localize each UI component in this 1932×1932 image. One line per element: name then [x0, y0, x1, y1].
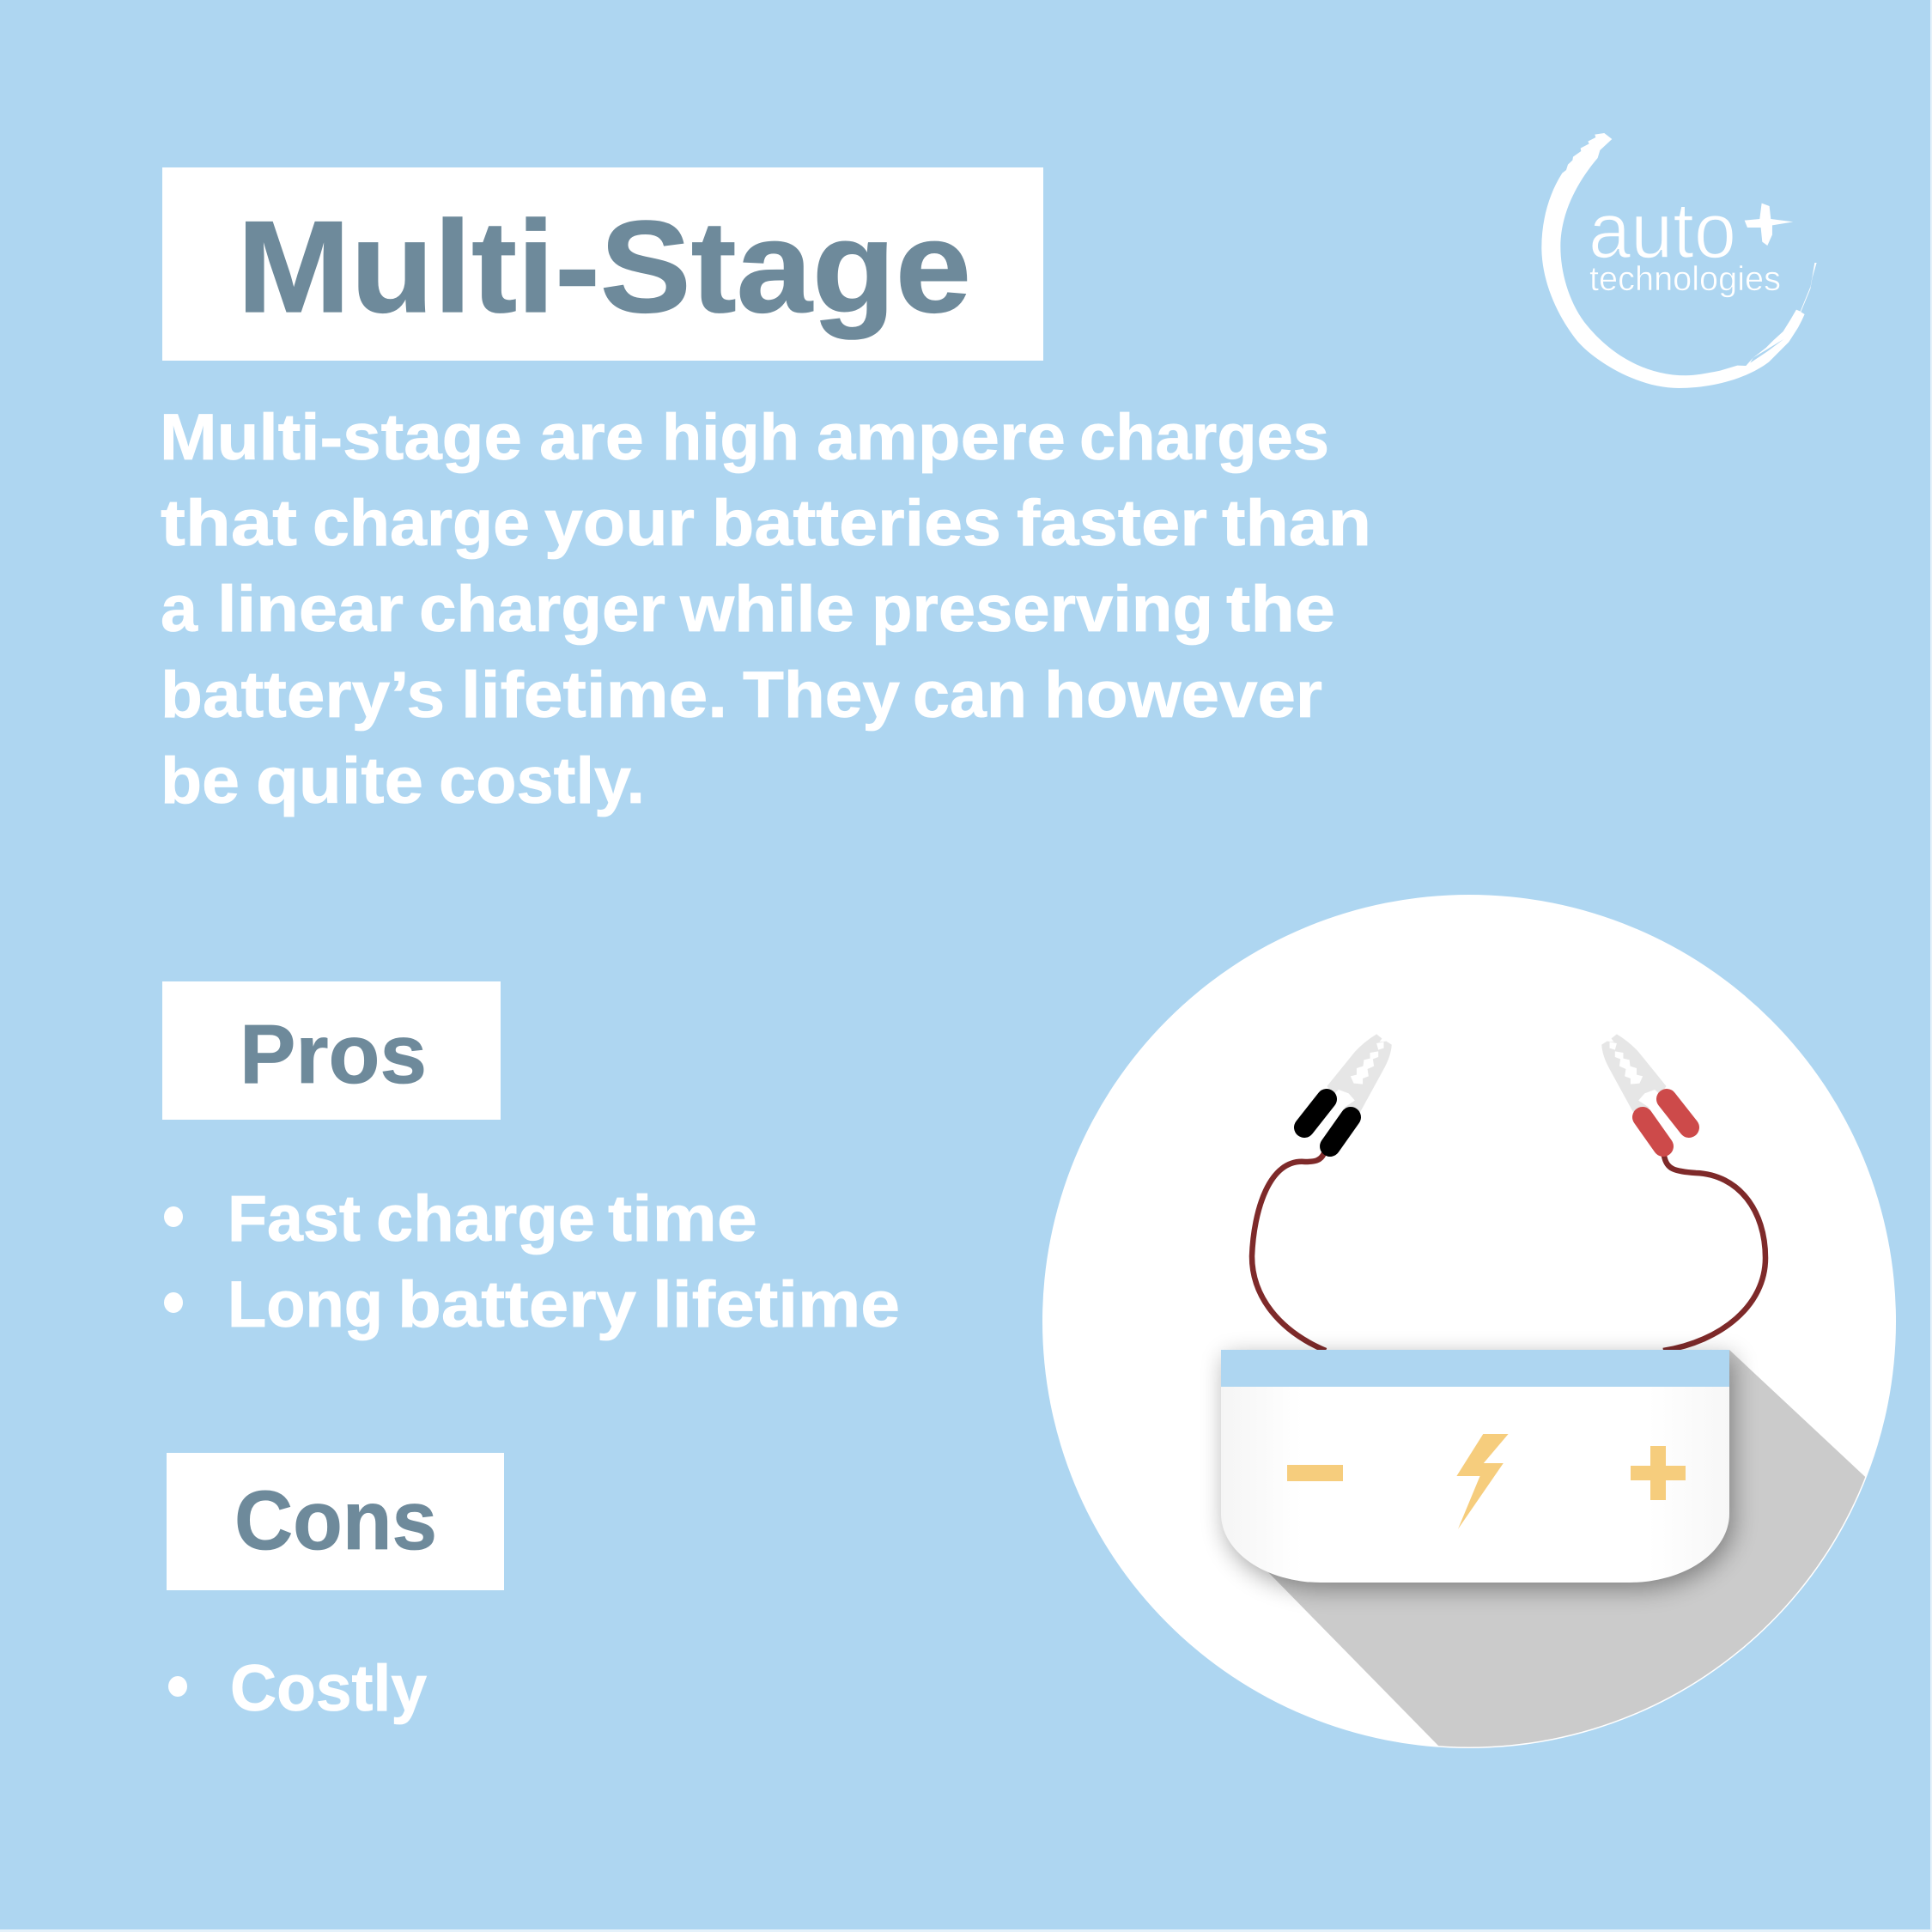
icon: plus terminal [1631, 1446, 1686, 1500]
description text block: high [662, 401, 799, 474]
description text block: linear [217, 573, 404, 646]
pros list [164, 1182, 900, 1341]
description text block: are [539, 401, 644, 474]
description text block: can [913, 659, 1027, 732]
cable: red clamp [1663, 1156, 1765, 1351]
title box [162, 167, 1043, 361]
description text block [160, 401, 1371, 817]
description text block: the [1226, 573, 1335, 646]
icon: lightning bolt [1456, 1434, 1509, 1529]
cons heading: Cons [234, 1473, 437, 1567]
description text block: however [1044, 659, 1322, 732]
description text block: Multi-stage [160, 401, 522, 474]
pros list: battery [398, 1268, 636, 1341]
logo: auto+ technologies [1541, 133, 1817, 388]
description text block: a [161, 573, 198, 646]
description text block: your [544, 487, 695, 560]
description text block: charge [313, 487, 530, 560]
battery [1221, 1350, 1734, 1589]
cable: black clamp [1252, 1153, 1326, 1351]
description text block: charges [1079, 401, 1329, 474]
pros heading: Pros [240, 1007, 427, 1101]
cons heading [167, 1453, 504, 1590]
logo word technologies: technologies [1589, 260, 1781, 298]
logo word auto: auto [1589, 187, 1736, 275]
description text block: batteries [712, 487, 1001, 560]
pros list: lifetime [653, 1268, 900, 1341]
description text block: charger [419, 573, 665, 646]
description text block: while [679, 573, 854, 646]
white circle [1042, 895, 1896, 1748]
cons list: Costly [230, 1652, 427, 1725]
pros list: Fast [228, 1182, 361, 1255]
long cast shadow [1268, 1350, 1865, 1747]
pros list: time [608, 1182, 757, 1255]
icon: minus terminal [1287, 1465, 1343, 1481]
logo plus [1745, 204, 1793, 246]
black clamp [1304, 1034, 1392, 1146]
description text block: They [743, 659, 900, 732]
title: Multi-Stage [237, 194, 971, 340]
pros list: Long [228, 1268, 383, 1341]
description text block: than [1222, 487, 1371, 560]
description text block: preserving [872, 573, 1213, 646]
description text block: ampere [817, 401, 1066, 474]
logo brush slit [1750, 339, 1783, 363]
description text block: be [161, 744, 240, 817]
description text block: faster [1017, 487, 1207, 560]
description text block: lifetime. [461, 659, 727, 732]
pros list: charge [376, 1182, 595, 1255]
description text block: battery’s [161, 659, 445, 732]
illustration: battery with clamps in white circle [1042, 895, 1896, 1748]
description text block: costly. [439, 744, 645, 817]
description text block: quite [256, 744, 423, 817]
pros heading [162, 981, 501, 1120]
logo brush ring [1541, 133, 1817, 388]
description text block: that [161, 487, 297, 560]
red clamp [1601, 1034, 1689, 1146]
